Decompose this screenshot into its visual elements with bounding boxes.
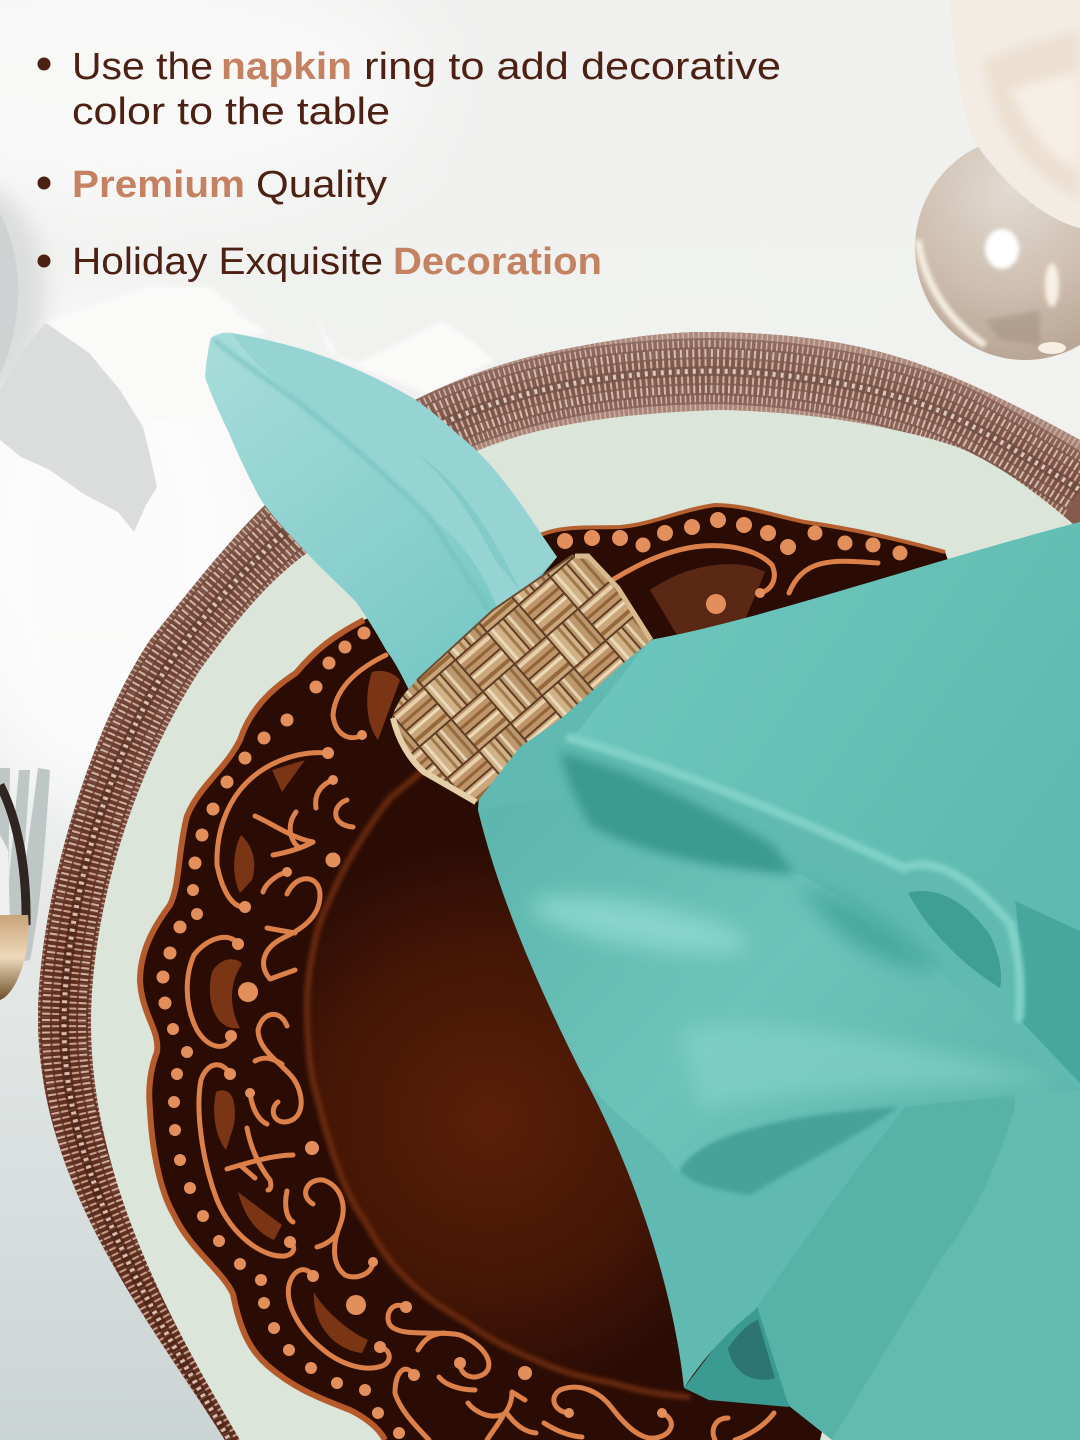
leaf shadow [0, 323, 157, 532]
napkin dark leaf fold [680, 1107, 898, 1195]
top left haze [0, 0, 420, 210]
napkin hollow [908, 891, 1001, 988]
charger plate inner [91, 410, 1080, 1440]
bullet 1 [38, 46, 781, 133]
napkin middle panel [478, 801, 1080, 1175]
napkin ridge [570, 738, 1020, 1018]
bullet 1: color to the table [72, 91, 390, 133]
bullet 2: Premium [72, 164, 245, 206]
bullet list [38, 46, 781, 283]
bullet 2: Quality [256, 164, 387, 206]
brown decorative plate [140, 505, 1000, 1440]
fork [0, 768, 50, 1000]
bullet 3: Decoration [393, 241, 602, 283]
side plate at left edge [0, 185, 45, 405]
bead dots [156, 512, 908, 1439]
bullet 1: napkin [221, 46, 352, 88]
bullet 3 [38, 241, 602, 283]
bullet 2 [38, 164, 387, 206]
napkin top ear [205, 333, 557, 690]
glaze patches [210, 564, 765, 1353]
bullet 3: Holiday Exquisite [72, 241, 383, 283]
bullet 1: ring to add decorative [364, 46, 781, 88]
scroll ornaments [187, 546, 878, 1440]
white haze on table [0, 300, 280, 820]
napkin right shadow [1015, 901, 1080, 1083]
bullet 1: Use the [72, 46, 213, 88]
napkin back panel [740, 1060, 1080, 1440]
wine glass [915, 0, 1080, 360]
charger plate rim [0, 300, 1080, 1440]
napkin upper panel [575, 522, 1080, 930]
napkin front body [478, 522, 1080, 1388]
napkin inner fold at base [684, 1300, 789, 1407]
napkin dark fold shadow [560, 752, 795, 875]
white leaf reflections [46, 287, 493, 420]
napkin fold shade [800, 884, 940, 972]
napkin highlight [528, 884, 752, 966]
napkin ring [392, 555, 652, 802]
plate well [307, 765, 720, 1397]
